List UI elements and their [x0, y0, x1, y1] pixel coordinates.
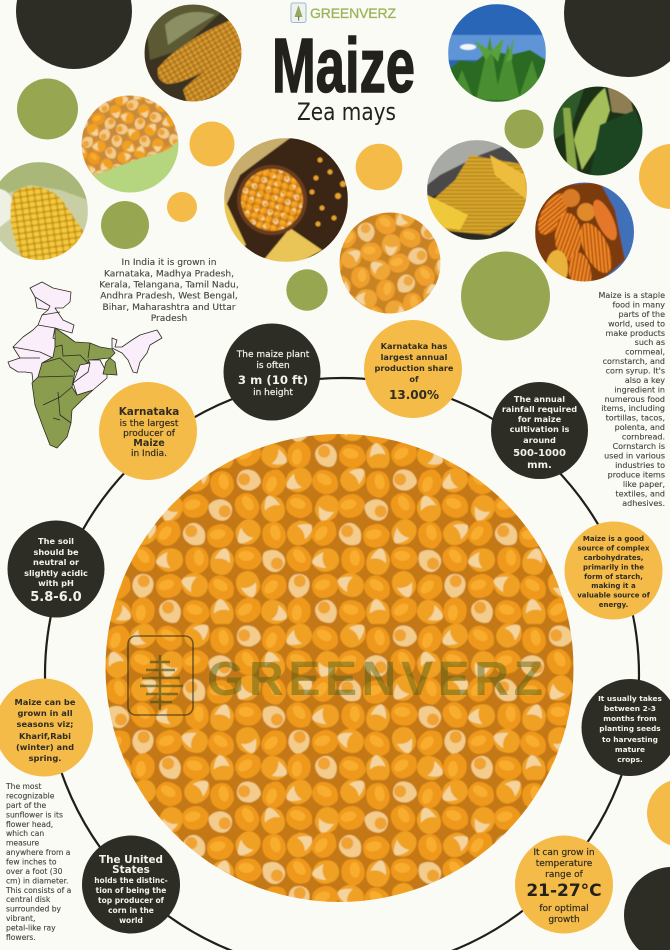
text: flower head note: part of the: [6, 801, 47, 810]
text: flower head note: recognizable: [6, 792, 55, 800]
callout: Karnataka largest producer: Karnataka: [119, 406, 179, 418]
callout: Karnataka largest producer: Maize: [133, 438, 165, 449]
text: uses of maize: textiles, and: [616, 490, 665, 498]
callout: temperature: [515, 836, 613, 934]
callout: carbohydrates: energy.: [599, 601, 628, 609]
text: flower head note: surrounded by: [6, 904, 62, 914]
callout: United States: tion of being the: [96, 886, 166, 895]
callout: carbohydrates: source of complex: [578, 544, 650, 552]
text: flower head note: [5, 782, 71, 942]
photo: boiled corn: [427, 140, 527, 240]
callout: rainfall: [491, 382, 588, 479]
photo: kernels on green: [81, 95, 179, 193]
map: India: [8, 282, 162, 448]
callout: seasons: [0, 678, 93, 776]
photo: kernels close-up: [340, 212, 440, 314]
text: flower head note: The most: [5, 782, 42, 791]
callout: seasons: Kharif,Rabi: [19, 731, 71, 741]
text: uses of maize: tortillas, tacos,: [606, 414, 665, 422]
text: uses of maize: make products: [606, 329, 665, 338]
title: Maize: [272, 23, 415, 109]
text: uses of maize: Maize is a staple: [598, 291, 665, 300]
callout: soil: with pH: [38, 578, 74, 588]
callout: rainfall: cultivation is: [510, 424, 570, 434]
callout: production share: of: [409, 374, 419, 384]
callout: temperature: temperature: [536, 859, 593, 869]
text: flower head note: few inches to: [6, 858, 57, 866]
photo: maize field and sky: [448, 4, 546, 102]
photo: corn cobs close-up: [144, 4, 243, 102]
callout: growing months: [582, 679, 670, 776]
text: flower head note: central disk: [6, 895, 51, 904]
text: where grown in India: Andhra Pradesh, West Bengal,: [100, 292, 238, 302]
callout: temperature: 21-27°C: [526, 881, 602, 901]
text: flower head note: measure: [6, 838, 39, 848]
callout: soil: The soil: [38, 536, 74, 546]
connecting ring: [45, 378, 639, 950]
callout: United States: corn in the: [108, 906, 154, 915]
callout: carbohydrates: making it a: [591, 582, 636, 590]
text: uses of maize: Cornstarch is: [613, 442, 665, 451]
text: flower head note: cm) in diameter.: [6, 876, 68, 886]
callout: carbohydrates: primarily in the: [583, 564, 644, 572]
callout: seasons: Maize can be: [15, 697, 76, 707]
callout: growing months: crops.: [617, 755, 643, 764]
text: uses of maize: numerous food: [605, 395, 665, 404]
text: flower head note: vibrant,: [6, 914, 35, 923]
text: uses of maize: cornstarch, and: [603, 357, 665, 366]
text: flower head note: flowers.: [6, 933, 36, 942]
photo: green husk: [553, 86, 643, 176]
callout: seasons: spring.: [29, 753, 61, 763]
text: flower head note: over a foot (30: [6, 867, 63, 876]
text: flower head note: petal-like ray: [6, 924, 56, 932]
central kernels photo: [100, 430, 580, 906]
text: uses of maize: corn syrup. It's: [606, 366, 665, 376]
callout: plant height: 3 m (10 ft): [238, 373, 308, 387]
callout: production share: Karnataka has: [381, 341, 447, 351]
callout: United States: holds the distinc-: [94, 876, 168, 885]
callout: production share: largest annual: [381, 352, 448, 362]
text: uses of maize: items, including: [601, 404, 665, 413]
callout: growing months: mature: [615, 745, 645, 754]
text: uses of maize: cornmeal,: [625, 348, 665, 356]
callout: Karnataka largest producer: is the largest: [120, 419, 179, 429]
callout: temperature: for optimal: [539, 904, 589, 914]
callout: rainfall: around: [523, 435, 556, 445]
text: uses of maize: industries to: [615, 461, 665, 470]
callout: growing months: to harvesting: [602, 735, 658, 744]
watermark logo: GREENVERZ: [207, 653, 543, 706]
photo: bowl of kernels: [224, 138, 348, 262]
callout: rainfall: 500-1000: [513, 448, 566, 459]
callout: plant height: is often: [256, 361, 290, 371]
callout: rainfall: rainfall required: [502, 404, 577, 414]
text: flower head note: flower head,: [6, 820, 53, 829]
text: flower head note: sunflower is its: [6, 810, 63, 820]
callout: plant height: [224, 324, 320, 420]
callout: Karnataka largest producer: in India.: [131, 449, 167, 459]
photo: yellow corn in husk: [0, 162, 88, 262]
callout: soil: neutral or: [33, 557, 80, 567]
callout: carbohydrates: form of starch,: [584, 573, 643, 581]
callout: temperature: growth: [548, 915, 580, 925]
callout: rainfall: for maize: [518, 414, 562, 424]
callout: carbohydrates: [564, 522, 662, 620]
watermark logo: [128, 636, 543, 715]
subtitle: Zea mays: [297, 98, 396, 126]
callout: soil: 5.8-6.0: [30, 590, 82, 605]
text: uses of maize: parts of the: [618, 310, 665, 319]
callout: soil: should be: [33, 547, 79, 557]
callout: Karnataka largest producer: producer of: [123, 429, 176, 439]
callout: temperature: It can grow in: [533, 848, 595, 858]
text: flower head note: This consists of a: [5, 886, 71, 895]
text: uses of maize: like paper,: [623, 480, 665, 489]
callout: United States: The United: [99, 854, 163, 866]
text: where grown in India: Kerala, Telangana, Tamil Nadu,: [99, 280, 239, 290]
text: where grown in India: In India it is grown in: [122, 258, 216, 268]
text: where grown in India: [99, 258, 239, 324]
photo: red cobs: [535, 182, 634, 282]
callout: growing months: planting seeds: [599, 724, 661, 733]
text: flower head note: which can: [6, 829, 44, 838]
callout: soil: slightly acidic: [24, 568, 88, 578]
text: uses of maize: ingredient in: [614, 386, 665, 394]
text: uses of maize: adhesives.: [622, 499, 665, 508]
text: uses of maize: world, used to: [608, 320, 665, 328]
text: where grown in India: Bihar, Maharashtra and Uttar: [102, 303, 236, 313]
callout: growing months: months from: [603, 714, 657, 723]
callout: seasons: seasons viz;: [17, 719, 73, 729]
text: where grown in India: Karnataka, Madhya Pradesh,: [104, 269, 234, 279]
callout: seasons: (winter) and: [16, 742, 74, 752]
callout: seasons: grown in all: [17, 708, 73, 718]
callout: carbohydrates: Maize is a good: [583, 535, 644, 543]
text: uses of maize: [598, 291, 665, 508]
callout: production share: production share: [375, 363, 454, 373]
text: uses of maize: food in many: [612, 300, 665, 310]
callout: carbohydrates: carbohydrates,: [584, 554, 643, 562]
callout: rainfall: The annual: [514, 394, 565, 404]
callout: Karnataka largest producer: [99, 382, 197, 480]
callout: carbohydrates: valuable source of: [577, 592, 651, 600]
callout: growing months: between 2-3: [604, 704, 656, 713]
callout: growing months: It usually takes: [598, 694, 663, 703]
callout: rainfall: mm.: [527, 460, 552, 471]
callout: soil: [8, 520, 104, 618]
text: uses of maize: also a key: [625, 376, 665, 385]
text: flower head note: anywhere from a: [6, 848, 70, 857]
callout: plant height: in height: [253, 388, 293, 398]
callout: United States: States: [112, 864, 150, 876]
logo: GREENVERZ: [310, 5, 396, 21]
text: uses of maize: cornbread.: [622, 432, 665, 442]
text: uses of maize: polenta, and: [615, 423, 665, 432]
callout: plant height: The maize plant: [236, 350, 310, 360]
logo: [291, 3, 396, 22]
callout: United States: [82, 836, 180, 934]
text: uses of maize: used in various: [604, 452, 665, 460]
callout: United States: world: [119, 916, 143, 925]
callout: United States: top producer of: [98, 896, 165, 905]
callout: production share: [364, 320, 462, 418]
callout: temperature: range of: [545, 870, 584, 880]
callout: production share: 13.00%: [389, 388, 439, 402]
text: uses of maize: produce items: [608, 470, 665, 480]
text: uses of maize: such as: [635, 338, 665, 347]
text: where grown in India: Pradesh: [151, 314, 187, 324]
